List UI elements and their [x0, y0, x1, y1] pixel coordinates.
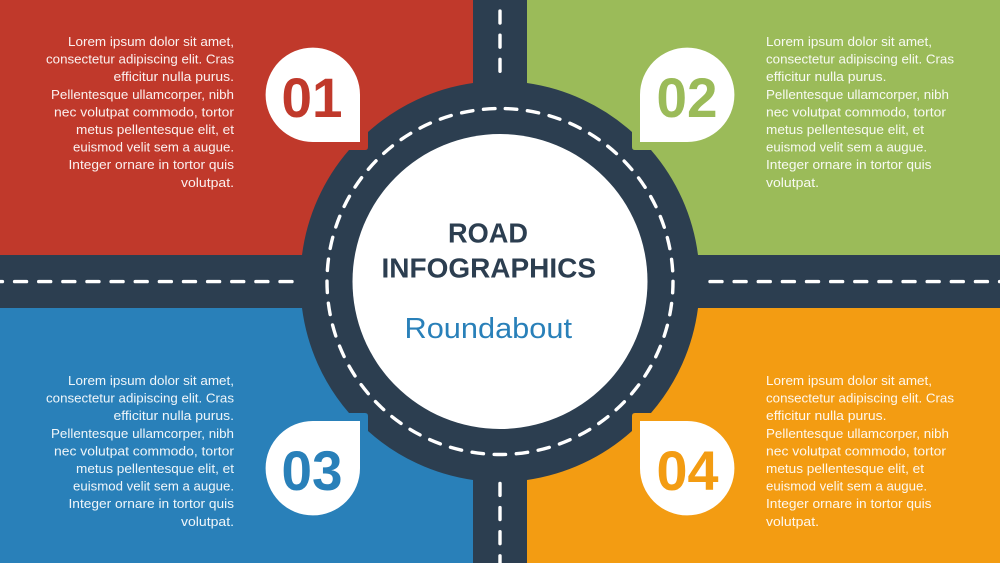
- text block: 03: Pellentesque ullamcorper, nibh: [51, 426, 234, 441]
- title: ROAD: [448, 218, 528, 248]
- text block: 04: volutpat.: [766, 514, 819, 529]
- title: INFOGRAPHICS: [382, 252, 596, 284]
- text block: 03: Integer ornare in tortor quis: [68, 496, 235, 511]
- text block: 02: Lorem ipsum dolor sit amet,: [766, 34, 932, 49]
- text block: 01: nec volutpat commodo, tortor: [54, 104, 235, 119]
- text block: 03: euismod velit sem a augue.: [73, 479, 234, 494]
- text block: 04: [766, 373, 955, 529]
- text block: 04: Lorem ipsum dolor sit amet,: [766, 373, 932, 388]
- text block: 04: nec volutpat commodo, tortor: [766, 443, 947, 458]
- roundabout centre circle: [352, 134, 648, 429]
- text block: 03: efficitur nulla purus.: [114, 408, 234, 423]
- subtitle: Roundabout: [404, 313, 572, 345]
- text block: 04: efficitur nulla purus.: [766, 408, 886, 423]
- text block: 03: metus pellentesque elit, et: [76, 461, 234, 476]
- text block: 01: volutpat.: [181, 175, 234, 190]
- pin: 02: 02: [656, 66, 718, 129]
- text block: 01: Lorem ipsum dolor sit amet,: [68, 34, 234, 49]
- pin: 04: 04: [656, 439, 718, 502]
- text block: 01: metus pellentesque elit, et: [76, 122, 234, 137]
- text block: 02: volutpat.: [766, 175, 819, 190]
- text block: 01: Integer ornare in tortor quis: [68, 157, 235, 172]
- pin: 04: [640, 421, 734, 515]
- pin: 01: 01: [282, 66, 342, 129]
- pin: 02: [640, 48, 734, 142]
- text block: 01: Pellentesque ullamcorper, nibh: [51, 87, 234, 102]
- text block: 01: euismod velit sem a augue.: [73, 140, 234, 155]
- road: top arm: [473, 0, 527, 100]
- text block: 02: efficitur nulla purus.: [766, 69, 886, 84]
- text block: 02: metus pellentesque elit, et: [766, 122, 924, 137]
- road: bottom arm: [473, 463, 527, 563]
- text block: 01: efficitur nulla purus.: [114, 69, 234, 84]
- text block: 03: [46, 373, 235, 529]
- text block: 02: euismod velit sem a augue.: [766, 140, 927, 155]
- roundabout lane dashes: [327, 108, 673, 454]
- text block: 02: Pellentesque ullamcorper, nibh: [766, 87, 949, 102]
- text block: 04: Integer ornare in tortor quis: [766, 496, 932, 511]
- text block: 04: Pellentesque ullamcorper, nibh: [766, 426, 949, 441]
- pin: 03: [266, 421, 360, 515]
- text block: 04: euismod velit sem a augue.: [766, 479, 927, 494]
- text block: 02: consectetur adipiscing elit. Cras: [766, 52, 955, 67]
- panel: 04 orange: [527, 308, 1000, 563]
- panel: 01 red: [0, 0, 473, 255]
- pin: 01: [266, 48, 360, 142]
- text block: 01: [46, 34, 235, 190]
- text block: 03: consectetur adipiscing elit. Cras: [46, 391, 235, 406]
- text block: 01: consectetur adipiscing elit. Cras: [46, 52, 235, 67]
- road: left arm: [0, 255, 320, 308]
- text block: 04: metus pellentesque elit, et: [766, 461, 924, 476]
- pin: 03: 03: [282, 439, 342, 502]
- road: right arm: [680, 255, 1000, 308]
- text block: 03: Lorem ipsum dolor sit amet,: [68, 373, 234, 388]
- text block: 03: nec volutpat commodo, tortor: [54, 443, 235, 458]
- text block: 02: [766, 34, 955, 190]
- text block: 03: volutpat.: [181, 514, 234, 529]
- title: [382, 218, 596, 284]
- text block: 02: nec volutpat commodo, tortor: [766, 104, 947, 119]
- panel: 02 green: [527, 0, 1000, 255]
- text block: 02: Integer ornare in tortor quis: [766, 157, 932, 172]
- text block: 04: consectetur adipiscing elit. Cras: [766, 391, 955, 406]
- panel: 03 blue: [0, 308, 473, 563]
